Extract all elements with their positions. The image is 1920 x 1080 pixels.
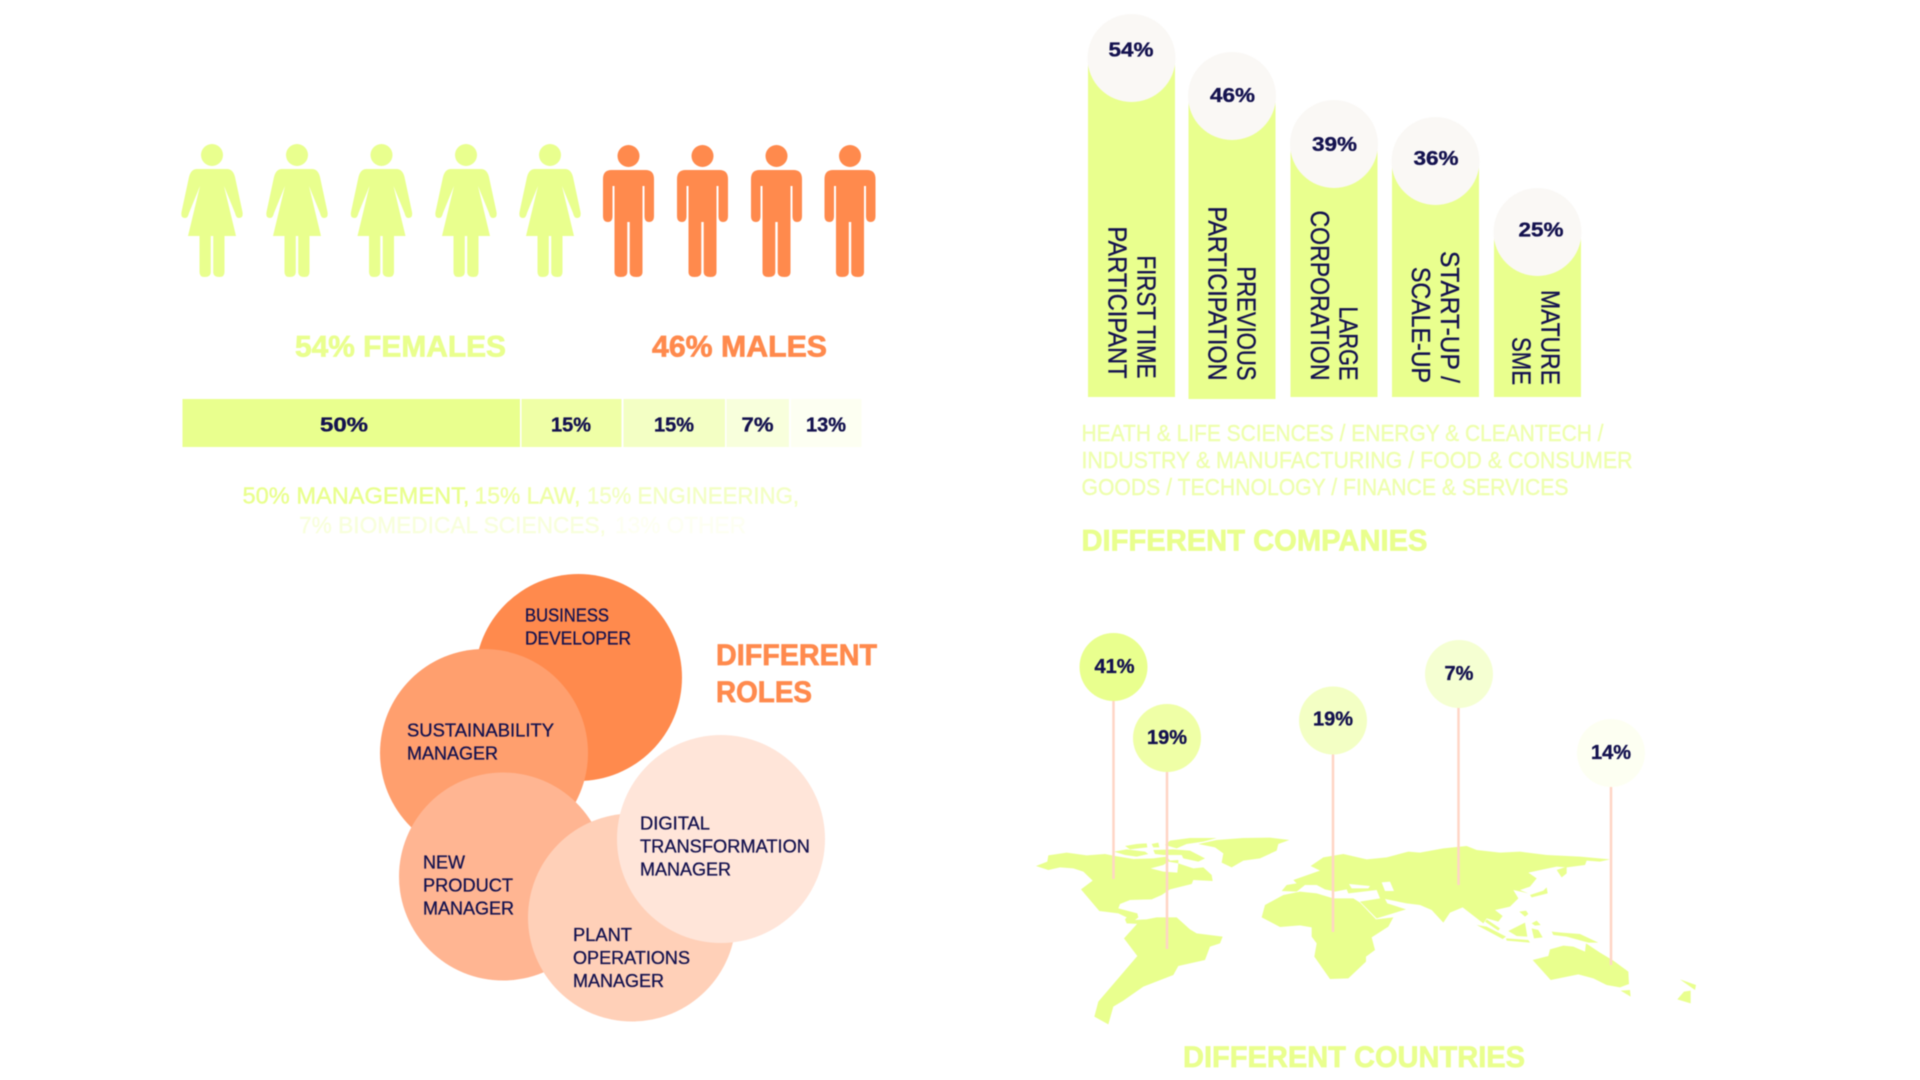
heading: different roles: ROLES	[716, 676, 812, 709]
label: females: 54% FEMALES	[295, 330, 506, 364]
bar: first time participant 54%	[1088, 14, 1176, 397]
circle: new product manager: MANAGER	[423, 898, 514, 918]
bar: mature SME 25%: MATURE	[1536, 290, 1566, 385]
heading: different companies: DIFFERENT COMPANIES	[1082, 524, 1428, 558]
bar: previous participation 46%	[1188, 52, 1276, 399]
panel: background stacked bar: 13%	[806, 414, 846, 436]
pin: 19% Americas	[1133, 704, 1201, 949]
text block: industries: HEATH & LIFE SCIENCES / ENERGY & CLEANTECH /	[1082, 420, 1604, 446]
text block: background breakdown: 50% MANAGEMENT,	[242, 482, 470, 508]
circle: new product manager: PRODUCT	[423, 874, 513, 896]
circle: plant operations manager	[528, 814, 736, 1022]
pin: 41%: 41%	[1094, 656, 1135, 678]
bar: large corporation 39%: CORPORATION	[1305, 210, 1335, 380]
bar: start-up / scale-up 36%	[1392, 117, 1480, 397]
circle: new product manager: NEW	[423, 852, 466, 872]
bar: large corporation 39%	[1290, 100, 1378, 397]
circle: plant operations manager: MANAGER	[573, 970, 664, 991]
pin: 19% Americas: 19%	[1147, 727, 1187, 749]
panel: world map with country pins	[1036, 633, 1696, 1024]
circle: business developer: DEVELOPER	[525, 628, 631, 648]
circle: sustainability manager	[380, 649, 588, 857]
bar: previous participation 46%: PREVIOUS	[1232, 266, 1262, 380]
bar: large corporation 39%: LARGE	[1334, 306, 1364, 380]
panel: background stacked bar	[182, 399, 862, 447]
pin: 19% Africa: 19%	[1313, 708, 1353, 730]
circle: plant operations manager: PLANT	[573, 924, 632, 945]
bar: first time participant 54%: PARTICIPANT	[1102, 226, 1132, 379]
pin: 14%	[1577, 719, 1645, 965]
text block: background breakdown: 15% LAW,	[474, 482, 580, 508]
bar: mature SME 25%: SME	[1506, 337, 1536, 385]
heading: different countries: DIFFERENT COUNTRIES	[1183, 1041, 1525, 1074]
text block: industries: INDUSTRY & MANUFACTURING / FOOD & CONSUMER	[1082, 447, 1632, 473]
bar: first time participant 54%: 54%	[1108, 40, 1154, 62]
pin: 7%	[1425, 640, 1493, 885]
label: males: 46% MALES	[652, 330, 827, 364]
bar: previous participation 46%: 46%	[1210, 85, 1255, 107]
bar: mature SME 25%: 25%	[1518, 220, 1564, 242]
panel: background stacked bar: 50%	[320, 414, 368, 436]
bar: previous participation 46%: PARTICIPATION	[1202, 206, 1232, 380]
pin: 7%: 7%	[1445, 663, 1474, 685]
circle: digital transformation manager	[617, 735, 825, 943]
circle: digital transformation manager: MANAGER	[640, 858, 731, 880]
panel: background stacked bar: 15%	[551, 414, 591, 436]
circle: business developer: BUSINESS	[525, 604, 609, 626]
circle: sustainability manager: MANAGER	[407, 742, 498, 764]
pin: 14%: 14%	[1591, 742, 1631, 764]
text block: background breakdown	[242, 482, 799, 538]
circle: business developer	[475, 574, 682, 781]
panel: background stacked bar: 15%	[654, 414, 694, 436]
circle: new product manager	[399, 772, 607, 980]
text block: industries: GOODS / TECHNOLOGY / FINANCE & SERVICES	[1082, 474, 1568, 500]
panel: background stacked bar: 7%	[742, 414, 774, 436]
text block: industries	[1082, 420, 1632, 500]
heading: different roles: DIFFERENT	[716, 639, 877, 672]
bar: start-up / scale-up 36%: SCALE-UP	[1406, 267, 1436, 383]
panel: gender split	[181, 144, 876, 364]
bar: first time participant 54%: FIRST TIME	[1132, 256, 1162, 378]
bar: start-up / scale-up 36%: START-UP /	[1435, 251, 1465, 384]
icon row: four male figures	[603, 145, 876, 277]
heading: different roles	[716, 639, 877, 709]
pin: 19% Africa	[1299, 686, 1367, 932]
icon row: five female figures	[181, 144, 581, 277]
circle: digital transformation manager: TRANSFORMATION	[640, 836, 810, 856]
bar: large corporation 39%: 39%	[1312, 134, 1357, 156]
circle: sustainability manager: SUSTAINABILITY	[407, 720, 554, 740]
text block: background breakdown: 13% OTHER	[615, 512, 746, 538]
pin: 41%	[1080, 633, 1148, 879]
circle: plant operations manager: OPERATIONS	[573, 947, 690, 968]
panel: different roles circles	[380, 574, 877, 1022]
bar chart: participant and company types	[1088, 14, 1582, 399]
bar: mature SME 25%	[1494, 188, 1582, 397]
world map: Americas and Greenland	[1036, 838, 1289, 1024]
text block: background breakdown: 15% ENGINEERING,	[587, 482, 799, 508]
circle: digital transformation manager: DIGITAL	[640, 812, 710, 834]
bar: start-up / scale-up 36%: 36%	[1414, 148, 1459, 170]
world map: Africa, Eurasia, Oceania	[1262, 846, 1696, 1003]
text block: background breakdown: 7% BIOMEDICAL SCIENCES,	[299, 512, 606, 538]
